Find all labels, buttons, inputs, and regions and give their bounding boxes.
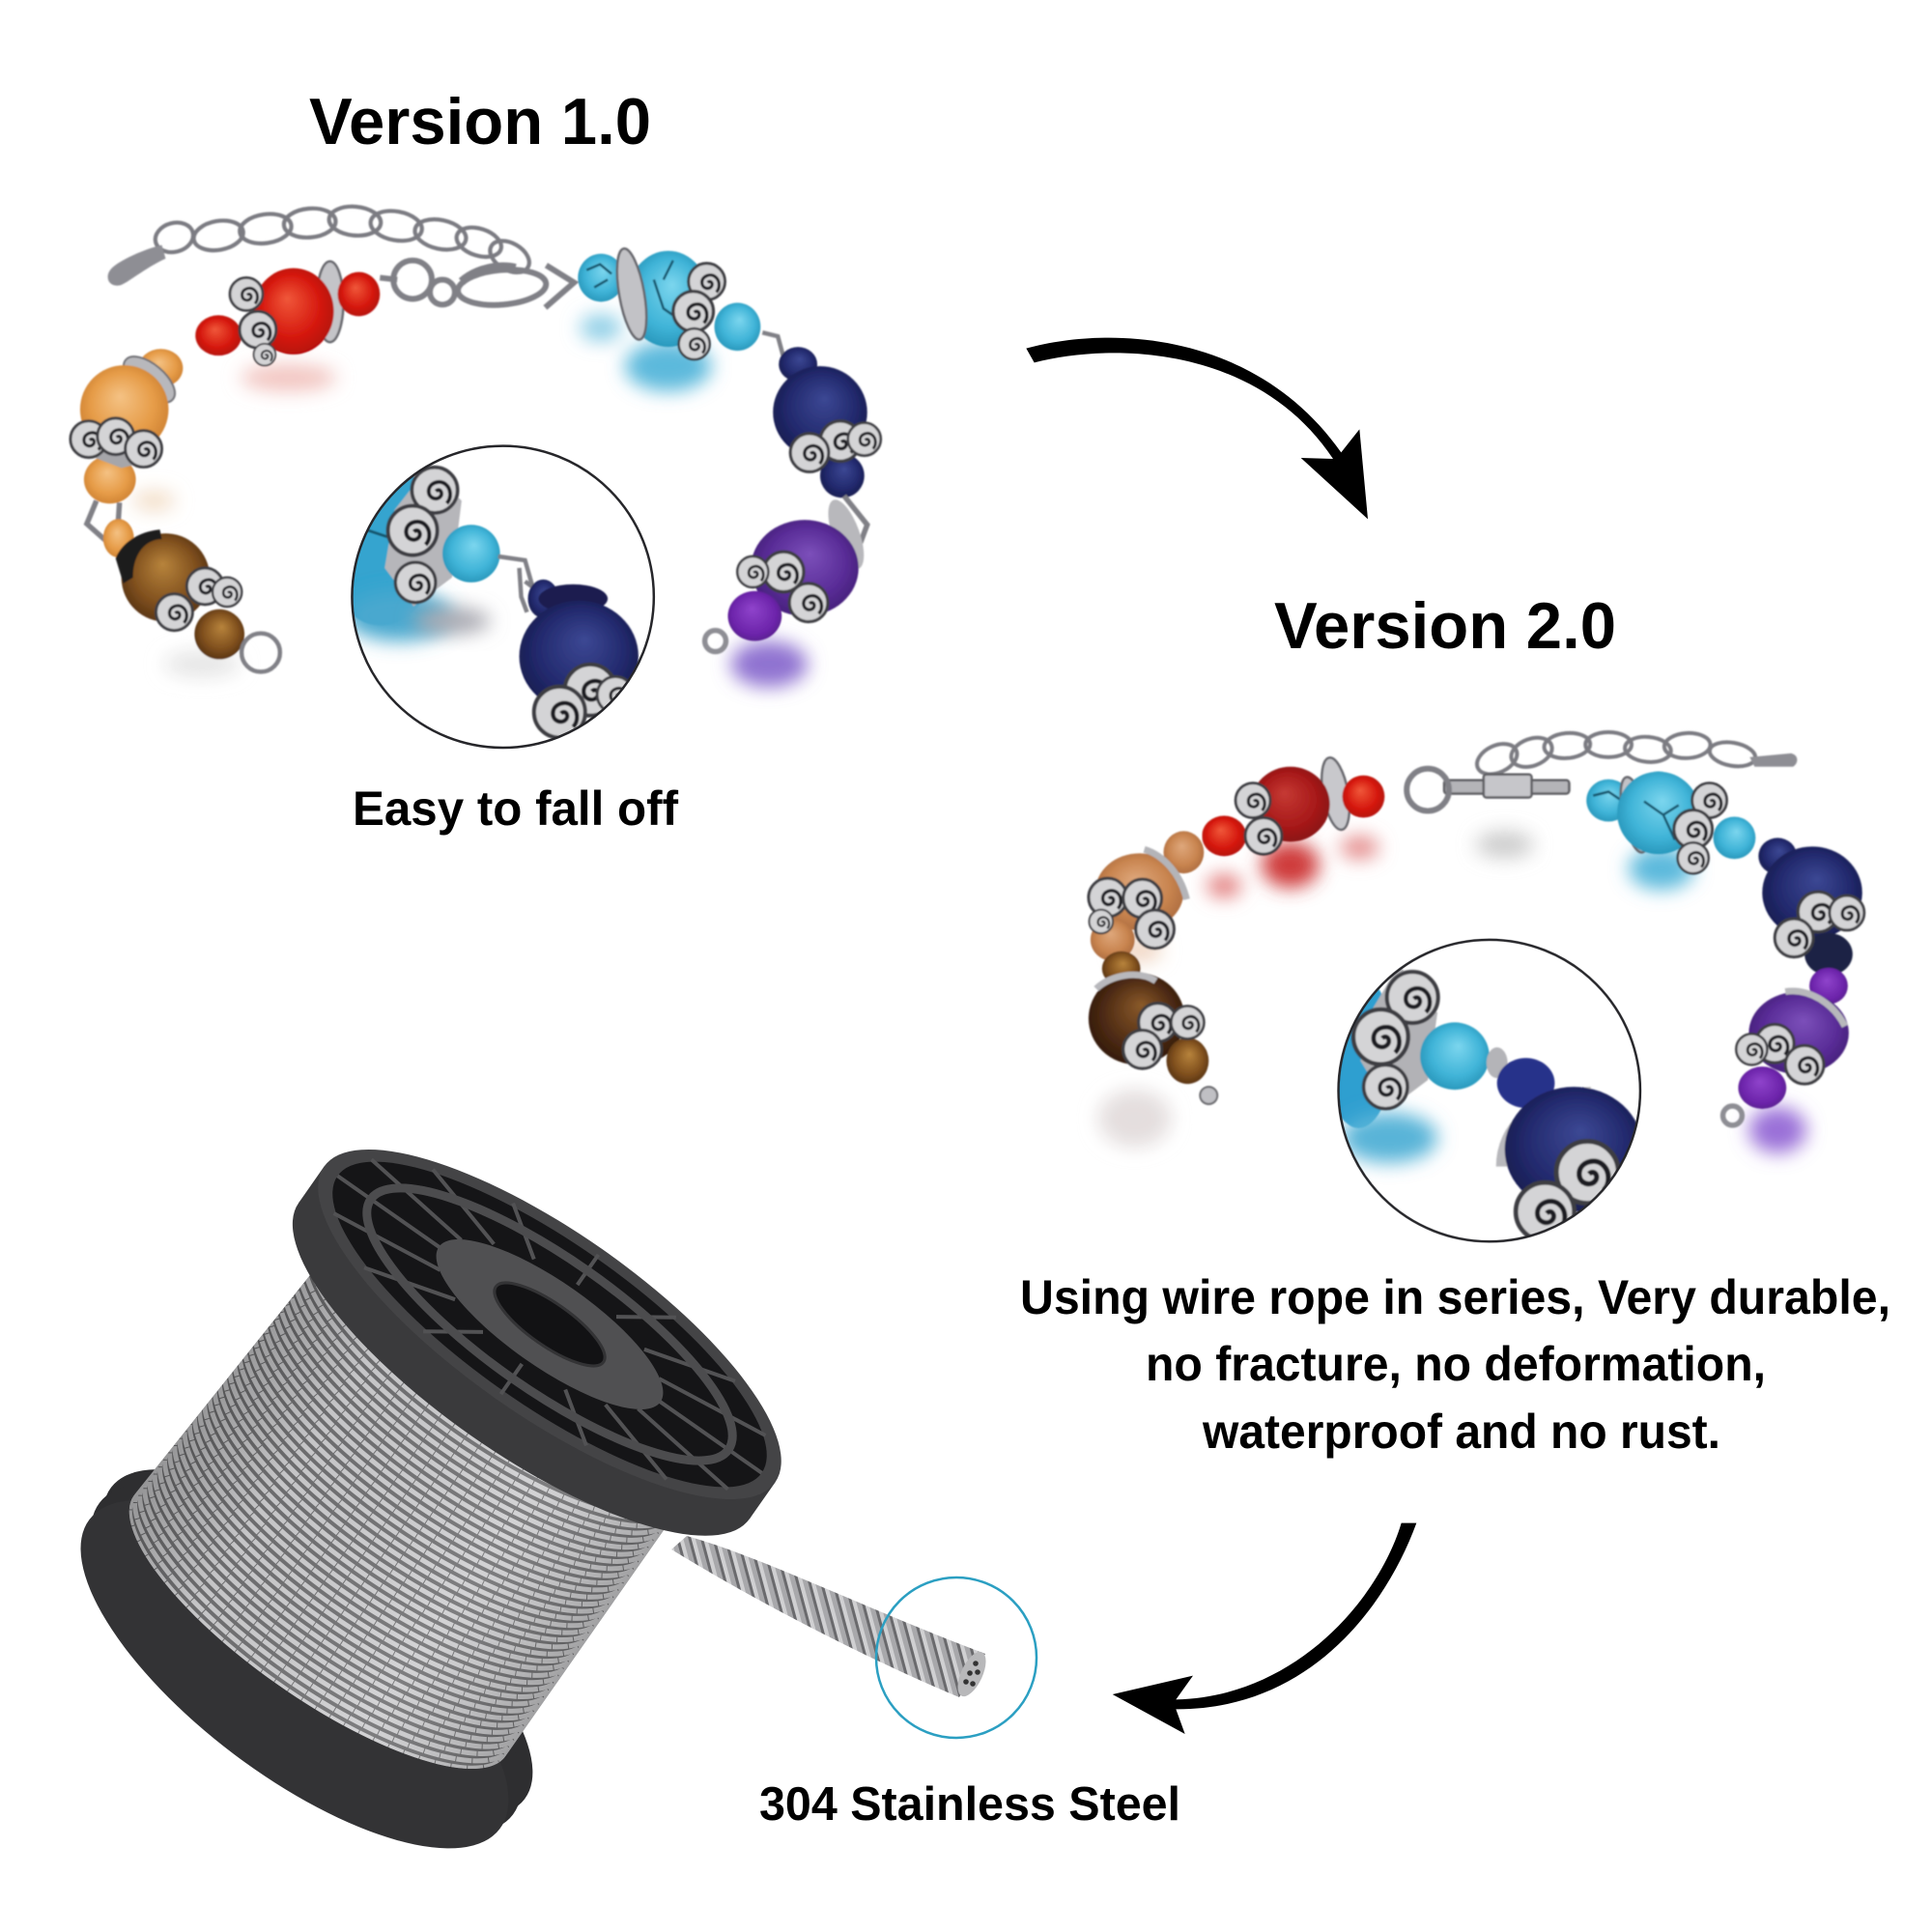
purple beads <box>705 496 871 652</box>
red beads <box>195 262 380 365</box>
turquoise bead in circle <box>1420 1022 1490 1090</box>
silver spacer in circle <box>1487 1047 1508 1078</box>
tiger eye beads <box>103 517 244 659</box>
line 2: no fracture, no deformation, <box>1146 1337 1766 1391</box>
bracelet: version 2.0 <box>1089 731 1864 1153</box>
caption: easy to fall off: Easy to fall off <box>353 781 678 836</box>
lower swirls in circle <box>1556 1141 1618 1204</box>
connector ring <box>87 500 120 539</box>
arrow: version 2.0 to wire spool <box>1113 1523 1416 1734</box>
chain end drop <box>108 245 165 286</box>
top flange rim <box>246 1092 828 1594</box>
arrow: version 1.0 to 2.0 <box>1026 338 1368 519</box>
turquoise beads <box>578 246 760 359</box>
wire spool <box>81 1150 781 1849</box>
extension chain <box>152 205 535 279</box>
free rope end <box>671 1536 992 1700</box>
tiger eye beads <box>1089 952 1217 1104</box>
bracelet: version 1.0 <box>71 205 881 687</box>
swirl cap in circle <box>1360 968 1438 1095</box>
reflections under bracelet 1 <box>133 314 808 687</box>
end ring <box>242 634 280 671</box>
extension chain <box>1472 731 1757 781</box>
hub hole <box>484 1269 615 1379</box>
navy beads <box>1758 838 1864 976</box>
chain end drop <box>1749 753 1797 767</box>
wire link in circle <box>498 556 532 612</box>
orange beads <box>1089 831 1204 961</box>
wire body <box>129 1275 664 1769</box>
purple beads <box>1722 968 1849 1125</box>
highlight circle on rope end <box>876 1577 1037 1738</box>
navy beads <box>762 332 881 497</box>
line 3: waterproof and no rust. <box>1202 1405 1720 1459</box>
lower swirls in circle <box>565 665 616 716</box>
swirl cap in circle <box>384 490 462 607</box>
line 1: Using wire rope in series, Very durable, <box>1020 1270 1890 1324</box>
reflections under bracelet 2 <box>1098 831 1806 1153</box>
connector link <box>844 496 867 540</box>
navy beads in circle <box>1497 1058 1554 1108</box>
turquoise bead and shadow in circle <box>1339 989 1382 1128</box>
turquoise beads <box>1586 772 1755 873</box>
navy beads in circle <box>528 580 558 618</box>
zoom circle: version 2.0 connection <box>1324 940 1643 1241</box>
blurred turquoise bead in circle <box>354 476 419 626</box>
hub disc <box>414 1212 685 1436</box>
flange spokes <box>289 1106 810 1543</box>
rope cross-section <box>952 1648 992 1700</box>
description text <box>1020 1270 1890 1459</box>
orange beads <box>71 348 183 503</box>
caption: 304 stainless steel: 304 Stainless Steel <box>759 1778 1180 1831</box>
bottom flange <box>27 1410 582 1910</box>
title: version 2.0: Version 2.0 <box>1274 589 1616 663</box>
zoom circle: version 1.0 connection <box>324 446 654 748</box>
flange inner ring <box>333 1146 766 1503</box>
circle outline <box>1339 940 1640 1241</box>
lobster clasp <box>380 261 574 308</box>
clasp <box>1406 769 1569 810</box>
title: version 1.0: Version 1.0 <box>309 85 651 158</box>
turquoise bead in circle <box>442 525 500 582</box>
red beads <box>1202 755 1384 856</box>
circle outline <box>352 446 654 748</box>
flange face cells <box>291 1109 809 1540</box>
